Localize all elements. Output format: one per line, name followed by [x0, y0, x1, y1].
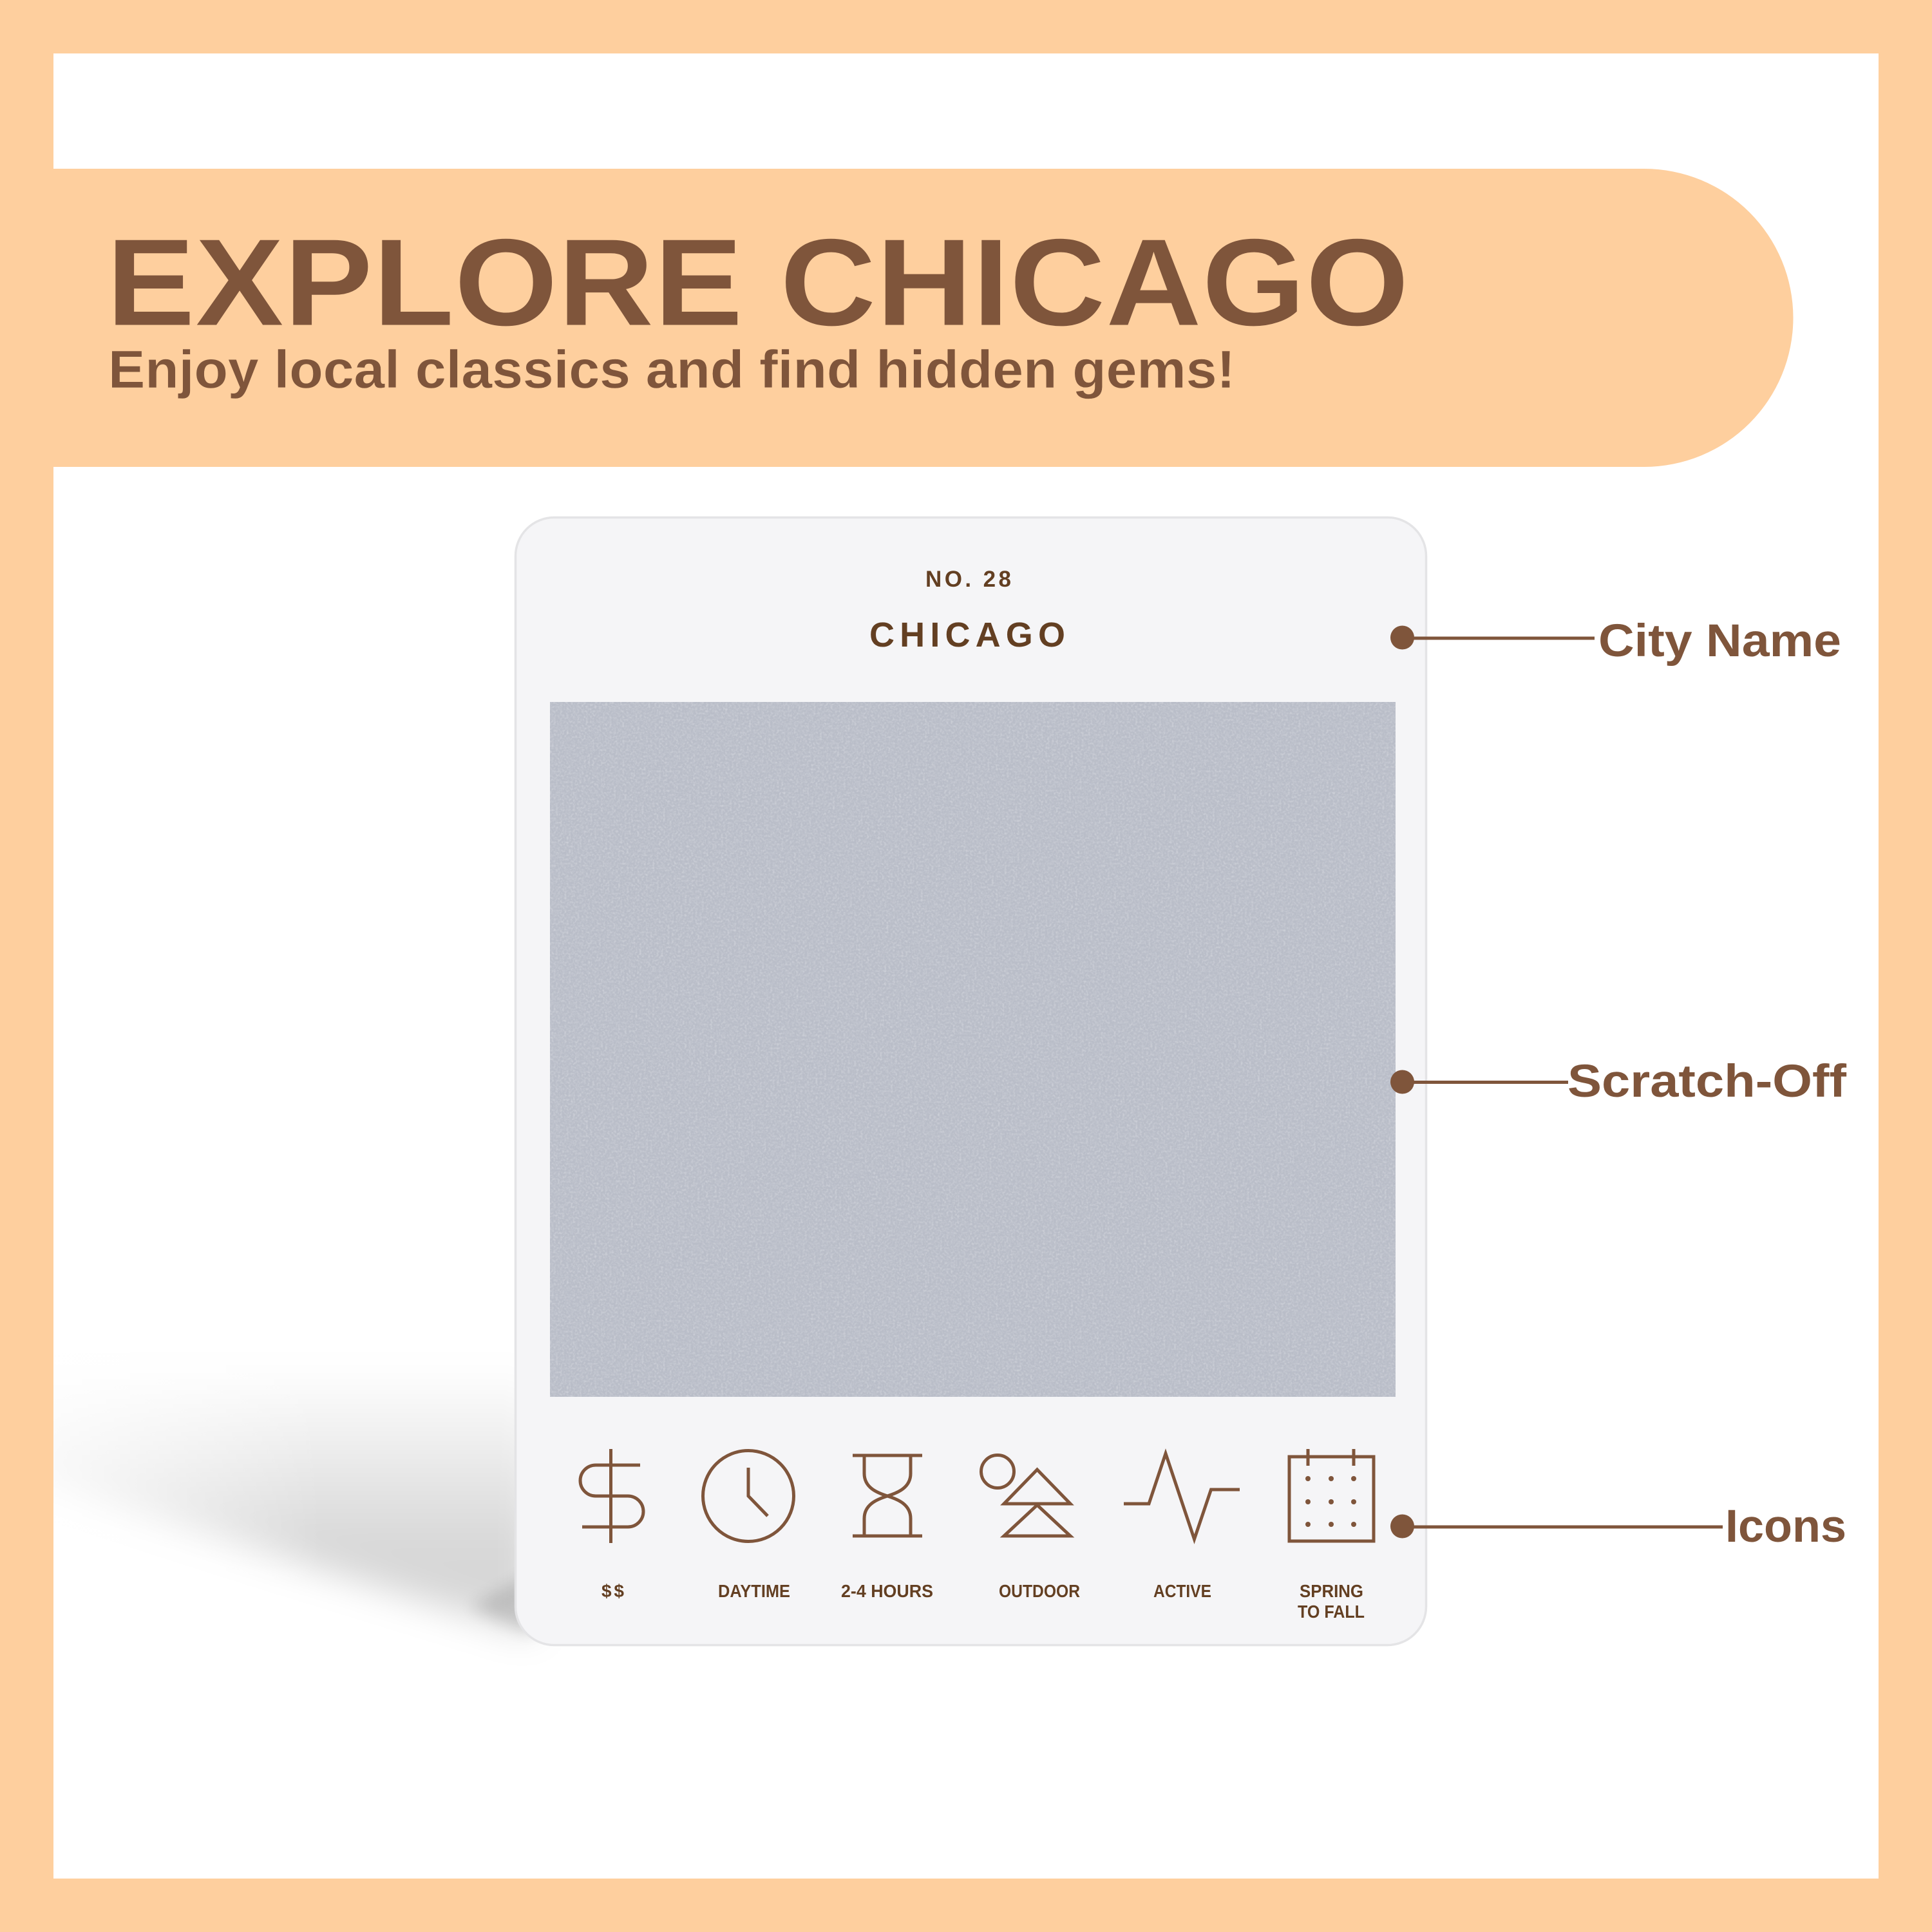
icon: hourglass	[853, 1455, 922, 1536]
scratch-off area	[550, 702, 1396, 1397]
icon: dollar	[580, 1449, 643, 1543]
label: season: SPRING	[1300, 1581, 1363, 1601]
callout: icons	[1390, 1501, 1846, 1552]
callout: city name: City Name	[1598, 616, 1841, 667]
panel: scratch card	[515, 518, 1426, 1645]
label: season	[1298, 1581, 1365, 1622]
card body	[515, 518, 1426, 1645]
callout: scratch-off	[1390, 1056, 1846, 1107]
callout: scratch-off: Scratch-Off	[1567, 1056, 1846, 1107]
callout: city name	[1390, 616, 1841, 667]
icon: activity pulse	[1124, 1454, 1240, 1539]
card number: NO. 28	[925, 567, 1011, 592]
callout: icons: Icons	[1725, 1501, 1846, 1552]
label: outdoor: OUTDOOR	[999, 1581, 1080, 1601]
label: price: $$	[601, 1581, 624, 1601]
card cast shadow	[26, 1340, 535, 1636]
label: duration: 2-4 HOURS	[841, 1581, 933, 1601]
icon: clock	[703, 1450, 793, 1542]
label: daytime: DAYTIME	[718, 1581, 790, 1601]
icon: outdoor	[981, 1455, 1070, 1536]
card city name: CHICAGO	[869, 616, 1065, 654]
icon: calendar	[1289, 1449, 1374, 1541]
subtitle: Enjoy local classics and find hidden gems!	[108, 339, 1235, 399]
title: EXPLORE CHICAGO	[106, 213, 1409, 352]
banner	[0, 169, 1793, 467]
label: active: ACTIVE	[1153, 1581, 1211, 1601]
label: season: TO FALL	[1298, 1602, 1365, 1622]
